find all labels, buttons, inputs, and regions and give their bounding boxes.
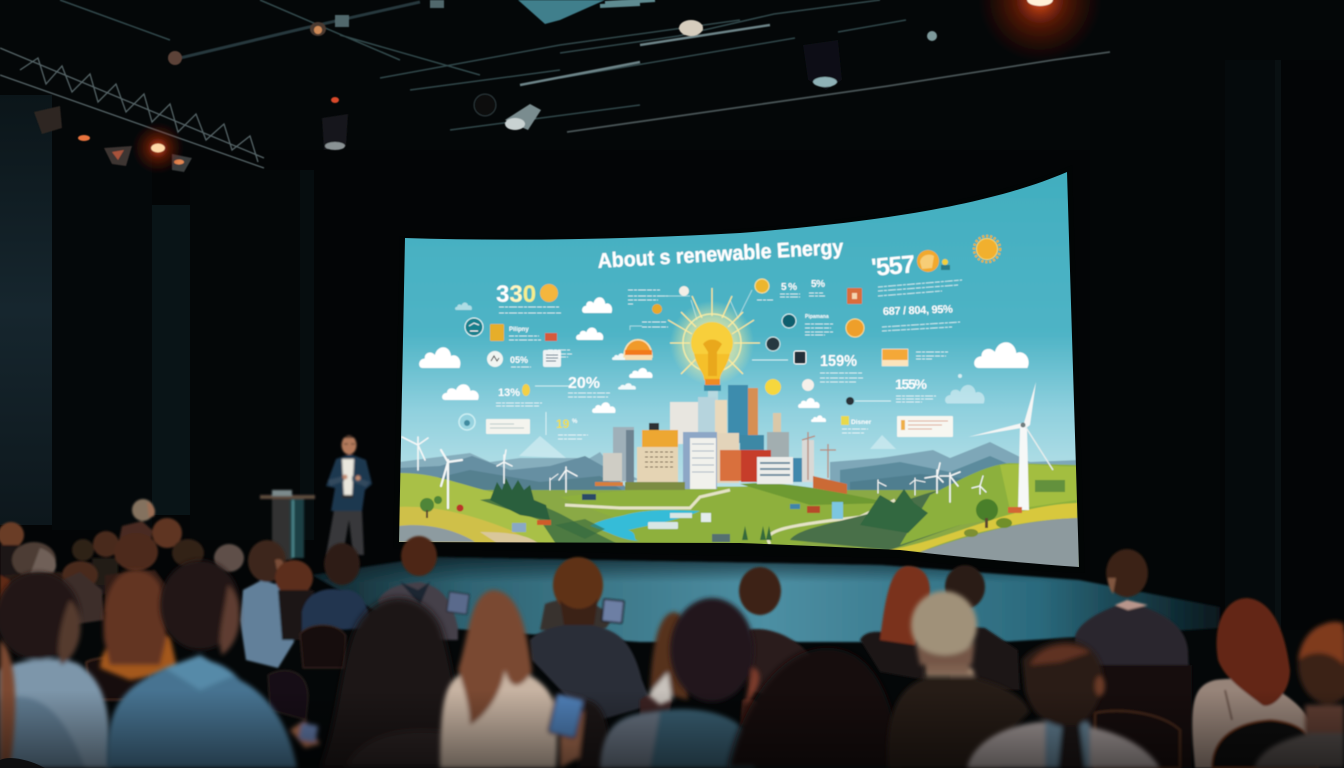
man red hair far right: [1254, 622, 1344, 768]
woman behind center head: [648, 612, 689, 705]
left hills: [400, 472, 556, 542]
icons right of bulb: 5%: [811, 279, 825, 290]
speaker: [326, 436, 372, 555]
left icons and cards: Pilipny: [509, 327, 529, 333]
note right of city: [841, 416, 872, 433]
landscape small objects: [456, 494, 843, 542]
orange dome icon: [624, 340, 652, 360]
city skyline: [595, 385, 847, 494]
left icons and cards: 05%: [510, 355, 528, 365]
podium: [260, 490, 315, 560]
woman dark hair: [320, 598, 505, 768]
orange card: [882, 349, 948, 366]
front row man blue: [107, 560, 320, 768]
man center with tablet: [530, 557, 652, 720]
stat 155%: 155%: [895, 376, 928, 392]
pale peak shapes: [519, 435, 896, 458]
ground: [395, 463, 1085, 575]
stat 159%: 159%: [820, 353, 857, 370]
title: About s renewable Energy: [597, 236, 844, 273]
woman long auburn hair: [0, 590, 610, 768]
note right of city: Disner: [851, 419, 872, 426]
stat 557: '557: [870, 250, 916, 282]
ceiling rig: [0, 0, 1110, 174]
large turbine: [968, 382, 1053, 513]
woman red hair right: [1192, 598, 1318, 768]
stat 19% bottom: 19: [556, 417, 570, 431]
second row left: [62, 536, 469, 668]
stat 155%: [895, 376, 936, 402]
overhead pipes: [60, 0, 1110, 132]
icons right of bulb: 5%: [781, 282, 797, 293]
tree clusters: [420, 478, 1065, 540]
front row man left: [0, 572, 110, 768]
stat 330 left: 330: [496, 281, 536, 308]
right edge rows: [0, 758, 45, 768]
right group far: [860, 565, 1020, 690]
chairs mid: [86, 625, 346, 720]
stat 557: [870, 250, 962, 296]
audience: [0, 499, 1344, 768]
stat 687: [882, 304, 960, 331]
screen frame: [393, 165, 1085, 573]
left wall panel: [0, 95, 52, 525]
icons right of bulb: Pipamana: [805, 314, 829, 320]
stat 330 left: [496, 281, 561, 313]
pale roads: [565, 490, 895, 544]
screen clouds left: [419, 297, 653, 413]
mountains: [400, 442, 1077, 491]
woman orange top: [100, 570, 178, 680]
stat 13%: 13%: [498, 387, 520, 399]
sky: [395, 165, 1085, 505]
right valley: [790, 490, 952, 550]
woman front right: [967, 640, 1160, 768]
white card: [897, 416, 953, 437]
far rows left: [0, 499, 244, 612]
stat 20%: [568, 375, 610, 397]
stat 20%: 20%: [568, 375, 600, 392]
man dark suit right: [1075, 549, 1192, 768]
big cloud right: [974, 342, 1029, 368]
dark front head: [728, 648, 902, 768]
far man right of center: [640, 567, 812, 730]
sun icon: [974, 236, 1000, 262]
icons right of bulb: [752, 279, 891, 405]
grey hair man: [888, 591, 1030, 768]
projection screen infographic: [395, 165, 1085, 575]
left note: [459, 414, 530, 434]
light bulb: [668, 288, 760, 401]
small text blocks: [548, 290, 668, 357]
stat 19% bottom: %: [572, 419, 578, 425]
stat 687: 687 / 804, 95%: [883, 304, 953, 318]
curtains: [52, 60, 1344, 630]
ceiling opening: [518, 0, 605, 24]
center fields: [590, 486, 860, 542]
orange glow left: [132, 122, 184, 174]
bottom shadow: [0, 690, 1344, 768]
truss left: [0, 48, 264, 168]
stat 159%: [820, 353, 864, 382]
river: [590, 510, 700, 541]
orange glow top right: [978, 0, 1102, 62]
turbines small: [402, 437, 986, 508]
stage floor: [312, 557, 1220, 642]
pale clouds: [798, 374, 985, 422]
stage lamps: [34, 20, 937, 172]
left icons and cards: [455, 303, 561, 367]
stat 19% bottom: [546, 412, 588, 439]
small icons by bulb: [652, 286, 689, 314]
connector lines: [630, 290, 752, 330]
stat 13%: [496, 384, 569, 406]
center front head: [600, 598, 759, 768]
